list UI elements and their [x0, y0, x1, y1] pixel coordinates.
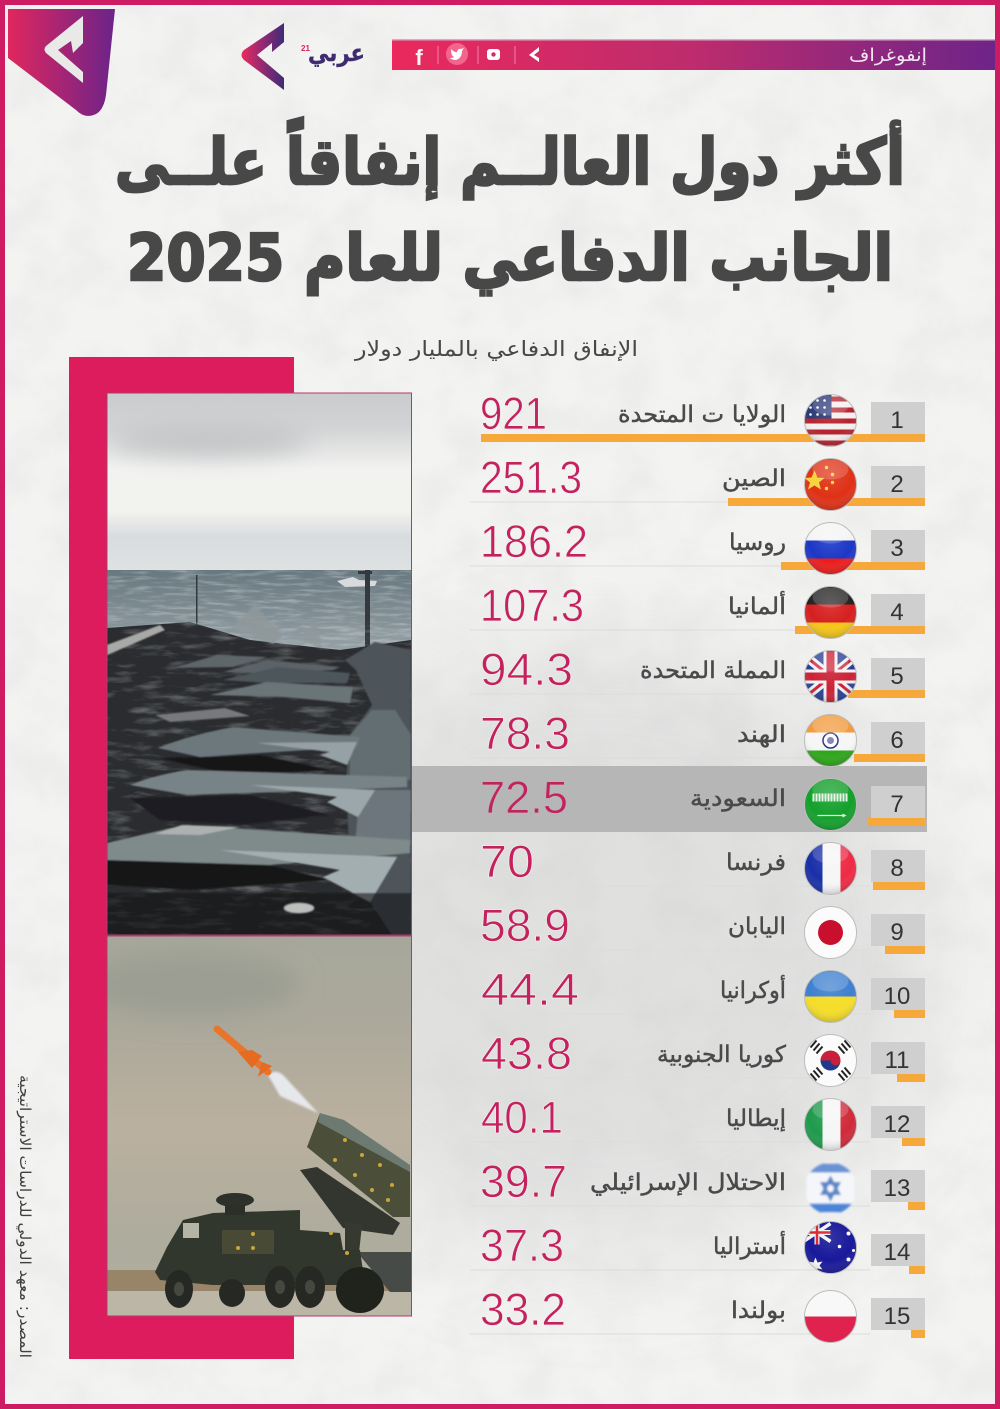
row 15: 33.2	[480, 1284, 566, 1335]
missile	[217, 1029, 318, 1113]
corner shield logo	[8, 9, 115, 116]
row 11	[470, 1028, 925, 1086]
brand logo: عربي	[308, 39, 365, 67]
brand logo	[242, 23, 365, 90]
row 9	[470, 900, 925, 958]
flag: Ukraine	[804, 970, 858, 1024]
row 8: فرنسا	[726, 850, 786, 876]
row 13	[470, 1162, 925, 1214]
row 1: 1	[890, 407, 904, 434]
row 14: 14	[884, 1239, 910, 1266]
icon: youtube	[487, 49, 500, 60]
row 8: 70	[480, 836, 534, 887]
row 11: كوريا الجنوبية	[657, 1042, 786, 1068]
photo outline	[107, 393, 412, 935]
flag: Australia	[804, 1220, 858, 1274]
row 3: 186.2	[480, 516, 588, 567]
highlight band: Saudi row	[412, 766, 927, 832]
row 2	[470, 458, 925, 511]
row 13: 39.7	[480, 1156, 567, 1207]
row 12	[482, 1098, 925, 1151]
row 7: السعودية	[690, 786, 786, 812]
row 5: المملة المتحدة	[640, 658, 786, 684]
flag: Israel	[806, 1162, 854, 1216]
pink photo frame	[69, 357, 294, 1359]
row 2: 251.3	[480, 452, 582, 503]
row 14	[470, 1220, 925, 1274]
row 2: 2	[890, 471, 904, 498]
photo: aircraft carrier	[107, 393, 411, 935]
tails	[345, 642, 411, 935]
source note: المصدر: معهد الدولي للدراسات الاستراتيجية	[15, 1075, 34, 1358]
photo outline	[107, 936, 412, 1316]
row 6: 78.3	[480, 708, 570, 759]
photo: missile launch	[80, 936, 411, 1316]
row 9: 58.9	[480, 900, 570, 951]
flag: USA	[804, 394, 858, 448]
flag: Russia	[804, 522, 858, 576]
row 9: اليابان	[728, 914, 786, 940]
row 15: بولندا	[731, 1298, 786, 1324]
row 6	[482, 714, 925, 766]
brand logo: 21	[301, 44, 310, 53]
flag: India	[804, 714, 858, 768]
row 5: 5	[890, 663, 904, 690]
row 10: 44.4	[481, 964, 579, 1015]
row 1: 921	[480, 388, 547, 439]
row 12: 12	[884, 1111, 910, 1138]
row 12: إيطاليا	[726, 1106, 786, 1132]
row 9: 9	[890, 919, 904, 946]
row 4: 4	[890, 599, 904, 626]
label: إنفوغراف	[849, 45, 927, 66]
icon: twitter	[446, 43, 468, 65]
icon: facebook: f	[415, 45, 423, 70]
row 6: 6	[890, 727, 904, 754]
row 13: 13	[884, 1175, 910, 1202]
row 4	[470, 586, 925, 639]
row 13: الاحتلال الإسرائيلي	[590, 1170, 786, 1196]
row 12: 40.1	[481, 1092, 563, 1143]
truck	[155, 1193, 384, 1313]
row 5: 94.3	[480, 644, 573, 695]
icon: chevron	[529, 47, 539, 62]
row 3	[470, 522, 925, 575]
row 10	[482, 970, 925, 1023]
flag: China	[804, 458, 858, 512]
flag: Japan	[804, 906, 856, 958]
row 11: 43.8	[481, 1028, 572, 1079]
flag: Poland	[804, 1290, 858, 1344]
flag: Germany	[804, 586, 858, 640]
header bar	[392, 39, 995, 70]
flag: France	[804, 842, 858, 896]
flag: South Korea	[804, 1034, 856, 1086]
flag: UK	[804, 650, 858, 704]
row 8: 8	[890, 855, 904, 882]
title	[115, 117, 905, 296]
launcher	[300, 1113, 411, 1292]
title: الجانب الدفاعي للعام 2025	[127, 222, 893, 296]
row 14: أستراليا	[713, 1231, 786, 1260]
row 7: 72.5	[480, 772, 568, 823]
row 3: روسيا	[729, 530, 786, 556]
row 2: الصين	[722, 466, 786, 492]
row 1: الولايا ت المتحدة	[618, 402, 786, 428]
row 4: 107.3	[480, 580, 584, 631]
subtitle: الإنفاق الدفاعي بالمليار دولار	[354, 337, 638, 361]
row 3: 3	[890, 535, 904, 562]
row 15	[470, 1290, 925, 1343]
row 1	[481, 394, 925, 447]
row 15: 15	[884, 1303, 910, 1330]
row 7: 7	[890, 791, 904, 818]
row 4: ألمانيا	[728, 591, 786, 620]
row 5	[470, 650, 925, 703]
row 10: أوكرانيا	[720, 975, 786, 1004]
flag: Saudi Arabia	[805, 779, 856, 830]
row 11: 11	[885, 1047, 909, 1074]
row 14: 37.3	[480, 1220, 564, 1271]
row 7	[482, 779, 925, 830]
row 6: الهند	[737, 722, 786, 748]
row 10: 10	[884, 983, 910, 1010]
row 8	[482, 842, 925, 895]
flag: Italy	[804, 1098, 858, 1152]
